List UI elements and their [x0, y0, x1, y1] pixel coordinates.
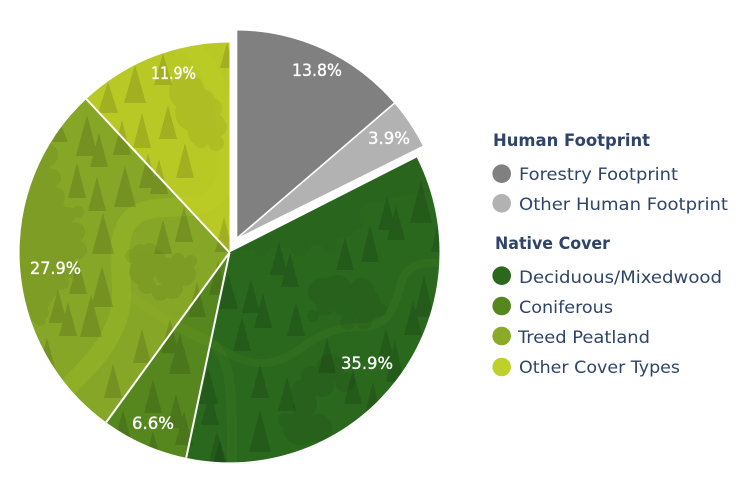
- legend marker: Forestry Footprint: [492, 164, 511, 183]
- trees: [38, 43, 449, 470]
- legend marker: Treed Peatland: [492, 327, 511, 345]
- slice: Coniferous: [106, 252, 230, 458]
- label: 3.9%: 3.9%: [368, 129, 410, 149]
- legend text: Other Human Footprint: Other Human Footprint: [519, 195, 728, 215]
- roads: [62, 44, 228, 394]
- value labels: [30, 61, 410, 434]
- legend text: Other Cover Types: Other Cover Types: [519, 358, 680, 378]
- shrub: deciduous centre: [307, 275, 387, 330]
- slice: Other Cover Types: [86, 42, 230, 252]
- slice: Forestry Footprint: [237, 30, 394, 238]
- shrub: deciduous lower: [278, 354, 355, 445]
- legend text: Treed Peatland: Treed Peatland: [517, 328, 650, 348]
- heading: Human Footprint: Human Footprint: [493, 131, 650, 151]
- slice: Treed Peatland: [20, 99, 230, 422]
- legend marker: Other Human Footprint: [492, 194, 511, 213]
- legend text: Deciduous/Mixedwood: Deciduous/Mixedwood: [519, 268, 722, 288]
- pie chart: land cover shares: [15, 30, 449, 470]
- label: 6.6%: 6.6%: [132, 414, 174, 434]
- shrub: other cover: [169, 74, 227, 151]
- label: 35.9%: 35.9%: [341, 354, 393, 374]
- heading: Native Cover: Native Cover: [495, 234, 611, 254]
- slice separators: [86, 99, 394, 458]
- legend marker: Other Cover Types: [492, 358, 511, 376]
- legend marker: Deciduous/Mixedwood: [492, 266, 511, 285]
- legend text: Forestry Footprint: Forestry Footprint: [519, 165, 678, 185]
- label: 27.9%: 27.9%: [30, 259, 81, 279]
- label: 13.8%: 13.8%: [292, 61, 342, 81]
- legend: [492, 131, 728, 378]
- shrub: peatland centre: [125, 243, 197, 301]
- slice: Other Human Footprint: [237, 103, 423, 238]
- shrubs: [20, 74, 227, 326]
- slice: Deciduous/Mixedwood: [186, 158, 439, 462]
- legend text: Coniferous: Coniferous: [519, 298, 613, 318]
- legend marker: Coniferous: [492, 297, 511, 315]
- shrub: peatland left: [15, 140, 87, 326]
- shrub: deciduous upper: [229, 150, 440, 256]
- forest texture: roads, shrubs and trees: [15, 43, 449, 470]
- label: 11.9%: 11.9%: [151, 64, 196, 84]
